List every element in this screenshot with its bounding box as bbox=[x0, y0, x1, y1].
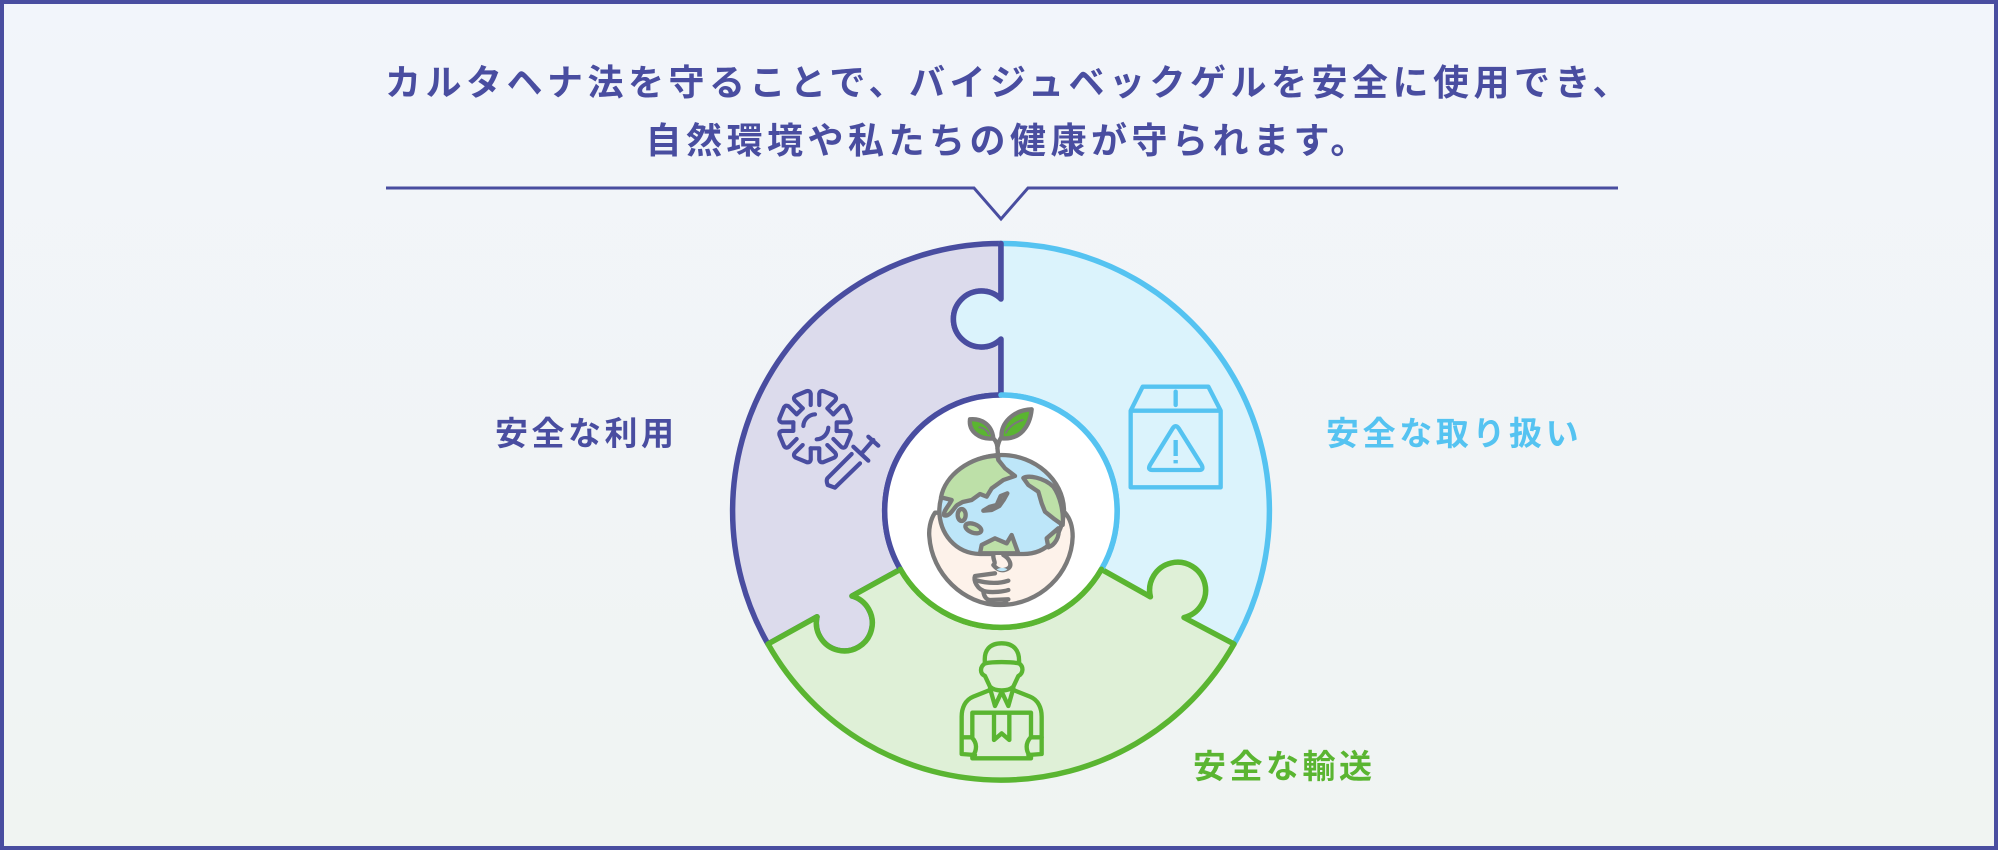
globe ocean bbox=[939, 455, 1064, 554]
label: safe transport: 安全な輸送 bbox=[1193, 748, 1376, 785]
center circle green edge bbox=[900, 569, 1101, 627]
collar and shoulders bbox=[962, 688, 1042, 755]
hands bbox=[929, 513, 1073, 605]
label: safe use: 安全な利用 bbox=[495, 415, 678, 452]
syringe bbox=[827, 437, 878, 488]
blue piece outline bbox=[1001, 243, 1269, 644]
panel: safe handling (blue piece) bbox=[953, 243, 1269, 644]
purple notch edge bbox=[953, 244, 1001, 395]
heading bbox=[385, 62, 1633, 161]
heading: 自然環境や私たちの健康が守られます。 bbox=[646, 120, 1371, 161]
center circle purple edge bbox=[885, 395, 1001, 569]
hands bbox=[962, 737, 1042, 755]
exclamation mark bbox=[1169, 440, 1182, 463]
callout rule with pointer bbox=[386, 188, 1618, 219]
puzzle circle diagram bbox=[733, 243, 1269, 780]
center white circle bbox=[885, 395, 1117, 627]
box body bbox=[1131, 387, 1221, 487]
panel: safe transport (green piece) bbox=[768, 562, 1234, 780]
icon: box with warning bbox=[1131, 387, 1221, 487]
continents bbox=[941, 456, 1063, 553]
icon: virus and syringe bbox=[777, 390, 878, 488]
box tape bbox=[1169, 392, 1182, 405]
fingers bbox=[975, 555, 1010, 604]
center circle blue edge bbox=[1001, 395, 1117, 569]
heading: カルタヘナ法を守ることで、バイジュベックゲルを安全に使用でき、 bbox=[385, 62, 1633, 103]
sprout bbox=[992, 435, 1003, 458]
virus teeth bbox=[777, 390, 853, 465]
warning triangle bbox=[1149, 426, 1202, 470]
face bbox=[981, 663, 1022, 690]
virus core arcs bbox=[803, 414, 828, 439]
icon: globe held in hands with sprout bbox=[929, 409, 1073, 605]
panel: safe use (purple piece) bbox=[733, 243, 1001, 651]
icon: delivery person with parcel bbox=[962, 643, 1042, 758]
cap bbox=[985, 643, 1019, 663]
islands bbox=[958, 493, 1007, 535]
parcel bbox=[972, 713, 1031, 758]
label: safe handling: 安全な取り扱い bbox=[1326, 415, 1582, 452]
